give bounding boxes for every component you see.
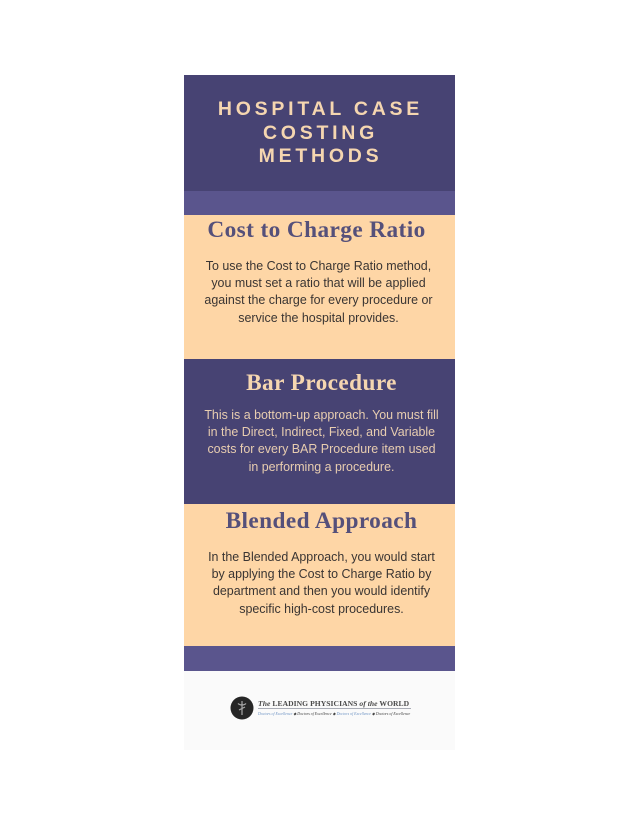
band: footer divider bbox=[184, 646, 455, 671]
heading: title: COSTING bbox=[263, 122, 378, 144]
text: blended approach description: by applying the Cost to Charge Ratio by bbox=[212, 567, 431, 581]
panel: title bbox=[184, 75, 455, 191]
heading: title: HOSPITAL CASE bbox=[218, 98, 423, 120]
divider: logo rule bbox=[258, 708, 411, 709]
infographic bbox=[184, 75, 455, 750]
text: blended approach description: specific high-cost procedures. bbox=[239, 602, 404, 616]
panel: blended approach bbox=[184, 504, 455, 646]
text: blended approach description: department and then you would identify bbox=[213, 584, 430, 598]
heading: title: METHODS bbox=[259, 145, 382, 167]
text: blended approach description bbox=[208, 550, 435, 616]
heading: blended approach: Blended Approach bbox=[226, 508, 417, 534]
text: bar procedure description: in the Direct, Indirect, Fixed, and Variable bbox=[208, 425, 435, 439]
text: cost to charge ratio description bbox=[204, 259, 433, 325]
text: cost to charge ratio description: service the hospital provides. bbox=[238, 311, 399, 325]
heading: cost to charge ratio: Cost to Charge Ratio bbox=[207, 217, 426, 243]
text: blended approach description: In the Blended Approach, you would start bbox=[208, 550, 435, 564]
text: cost to charge ratio description: you must set a ratio that will be applied bbox=[211, 276, 426, 290]
text: logo tagline: Doctors of Excellence ◆ Doctors of Excellence ◆ Doctors of Excellence ◆ Doctors of Excellence bbox=[258, 712, 410, 716]
panel: cost to charge ratio bbox=[184, 215, 455, 359]
heading: bar procedure: Bar Procedure bbox=[246, 370, 397, 396]
text: cost to charge ratio description: To use the Cost to Charge Ratio method, bbox=[206, 259, 431, 273]
text: bar procedure description: This is a bottom-up approach. You must fill bbox=[204, 408, 439, 422]
icon: logo seal bbox=[230, 696, 254, 720]
text: bar procedure description: costs for every BAR Procedure item used bbox=[207, 442, 436, 456]
text: bar procedure description: in performing a procedure. bbox=[249, 460, 394, 474]
text: logo name: The LEADING PHYSICIANS of the WORLD bbox=[258, 699, 409, 708]
heading: title bbox=[218, 98, 423, 167]
text: cost to charge ratio description: against the charge for every procedure or bbox=[204, 293, 433, 307]
band: title divider bbox=[184, 191, 455, 215]
text: bar procedure description bbox=[204, 408, 439, 474]
panel: bar procedure bbox=[184, 359, 455, 504]
panel: footer logo bbox=[184, 671, 455, 750]
